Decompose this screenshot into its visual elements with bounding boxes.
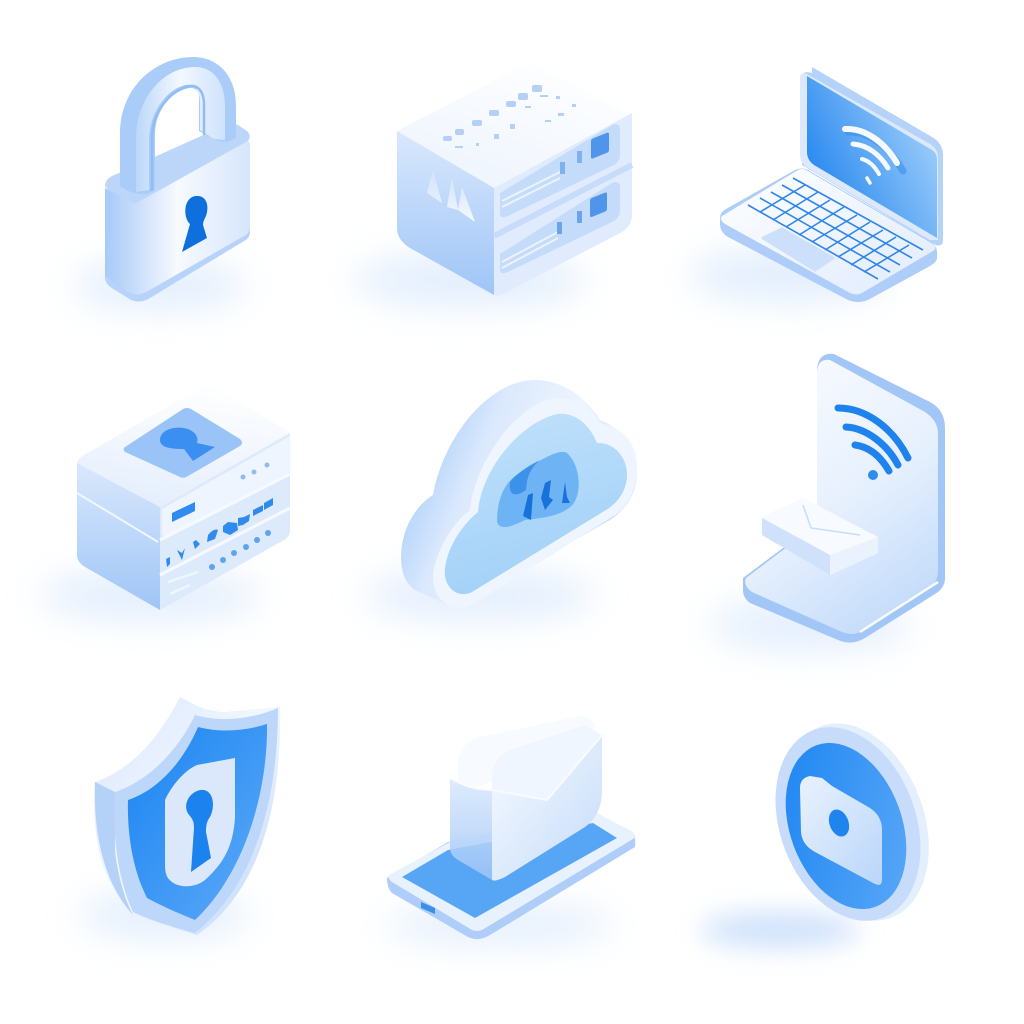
tablet body [387, 812, 635, 939]
envelope front face [492, 735, 602, 881]
usb port [421, 902, 435, 914]
upper drawer slot [500, 124, 620, 217]
shield side extrusion [94, 697, 280, 935]
icon: cloud [365, 380, 637, 619]
cloud white rim [433, 398, 637, 608]
trackpad [763, 229, 833, 270]
coin shadow [700, 912, 860, 948]
laptop base [720, 168, 937, 302]
shield rim [114, 708, 278, 933]
icon: server with keyhole [40, 384, 290, 619]
keyhole plate [165, 758, 235, 886]
lower drawer slot [500, 182, 620, 273]
panel edge [743, 354, 945, 643]
server right face [494, 113, 632, 296]
icon: envelope on tablet [385, 716, 635, 943]
coin rim back [757, 703, 955, 941]
triangles on side [427, 170, 475, 222]
envelope [762, 498, 878, 575]
server left face [77, 463, 160, 610]
cloud inner panel [445, 414, 627, 594]
coin rim [750, 707, 946, 941]
icon: phone with wifi and envelope [710, 354, 945, 649]
icon: shield [80, 697, 280, 937]
keyhole [182, 196, 207, 252]
keyboard [748, 178, 923, 279]
coin face [764, 726, 928, 926]
camera lens [825, 807, 853, 839]
keyhole [160, 428, 215, 461]
icon: laptop with wifi [690, 67, 943, 302]
cloud lock emblem [497, 452, 579, 527]
cloud back extrusion [401, 380, 637, 606]
shield blue face [128, 724, 267, 920]
icon: camera badge [700, 703, 955, 948]
icon: server rack [355, 62, 632, 306]
server top face [397, 62, 632, 190]
upright panel face [745, 360, 938, 634]
server right drawers [160, 433, 290, 610]
top panel [124, 408, 242, 478]
drawer divider [494, 165, 632, 236]
keyhole [186, 790, 213, 872]
server top dots [443, 85, 576, 148]
envelope [450, 716, 602, 881]
server ports [557, 132, 609, 234]
camera body [800, 776, 882, 885]
padlock shackle [120, 57, 236, 194]
wifi dot [868, 470, 878, 480]
wifi symbol [845, 129, 903, 183]
icon: padlock [75, 57, 250, 309]
tablet screen [402, 823, 617, 918]
server top face [77, 384, 290, 507]
laptop screen [802, 67, 943, 245]
padlock front body [105, 141, 250, 302]
wifi symbol [838, 408, 908, 471]
envelope left face [450, 778, 492, 880]
server left face [397, 131, 494, 295]
padlock top face [105, 123, 250, 204]
indicators [166, 462, 273, 570]
